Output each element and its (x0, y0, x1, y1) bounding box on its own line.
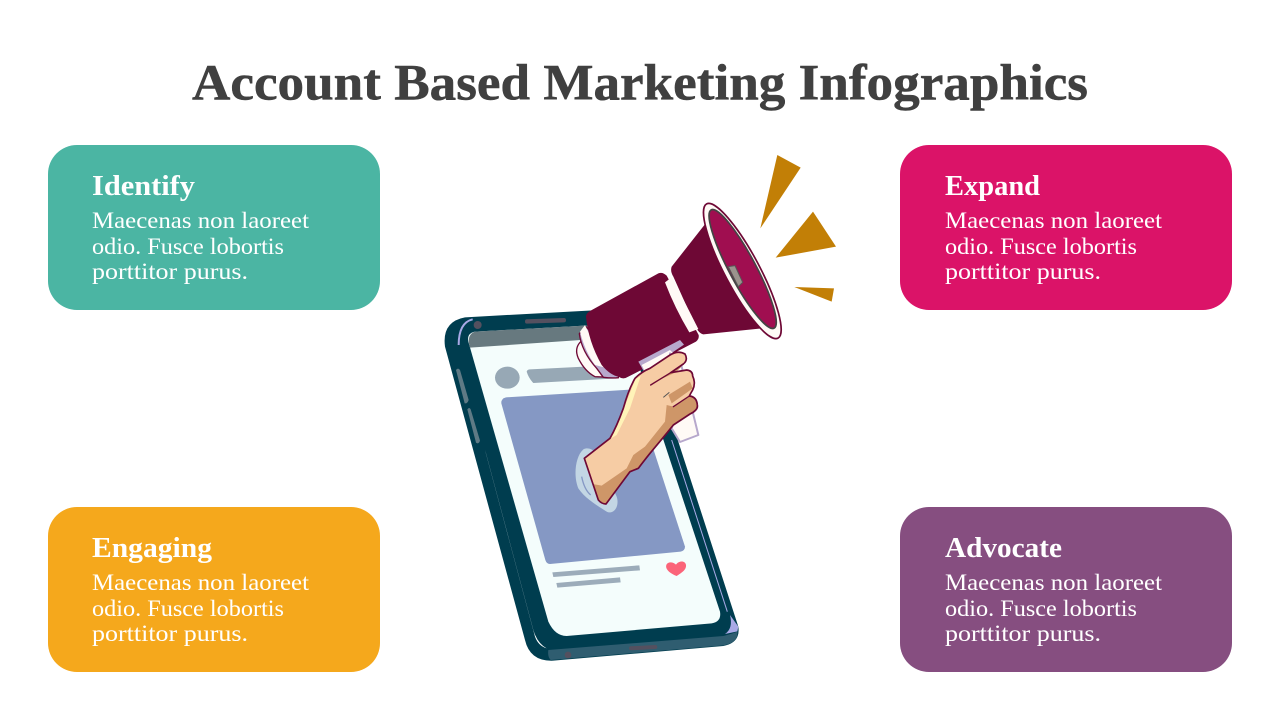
title: Account Based Marketing Infographics (192, 56, 1088, 112)
text block: advocate: Maecenas non laoreet (945, 570, 1163, 595)
heading: advocate: Advocate (945, 532, 1062, 564)
icon: hand holding handle (584, 340, 698, 504)
collar band (665, 277, 698, 332)
text block: identify (92, 208, 310, 284)
text block: expand: porttitor purus. (945, 259, 1101, 284)
text block: engaging (92, 570, 310, 646)
text block: expand (945, 208, 1163, 284)
rim (691, 196, 793, 346)
text block: engaging: odio. Fusce lobortis (92, 596, 284, 621)
heading: identify: Identify (92, 170, 196, 202)
panel: identify (48, 145, 380, 310)
text block: identify: odio. Fusce lobortis (92, 234, 284, 259)
icon: heart (666, 561, 686, 576)
rear cap (577, 327, 620, 378)
text block: advocate (945, 570, 1163, 646)
heading: expand: Expand (945, 170, 1040, 202)
avatar (495, 367, 520, 389)
bell inner (699, 204, 786, 334)
text block: advocate: porttitor purus. (945, 621, 1101, 646)
hand highlight (611, 376, 641, 439)
panel: engaging (48, 507, 380, 672)
panel: expand (900, 145, 1232, 310)
name bar (527, 365, 617, 383)
hand fill (584, 352, 697, 504)
text block: engaging: Maecenas non laoreet (92, 570, 310, 595)
caption lines (552, 565, 640, 588)
icon: megaphone (577, 155, 836, 378)
hand outline (584, 352, 697, 504)
sound burst (760, 155, 836, 302)
text block: engaging: porttitor purus. (92, 621, 248, 646)
handle (638, 340, 698, 442)
hand shadow (593, 396, 697, 504)
panel: advocate (900, 507, 1232, 672)
screen (468, 323, 720, 636)
post image (501, 389, 685, 564)
text block: expand: odio. Fusce lobortis (945, 234, 1137, 259)
text block: advocate: odio. Fusce lobortis (945, 596, 1137, 621)
text block: expand: Maecenas non laoreet (945, 208, 1163, 233)
finger creases (651, 373, 689, 407)
text block: identify: porttitor purus. (92, 259, 248, 284)
heading: engaging: Engaging (92, 532, 212, 564)
bell (671, 223, 768, 334)
icon: smartphone (445, 308, 739, 661)
hole splash (576, 448, 618, 512)
text block: identify: Maecenas non laoreet (92, 208, 310, 233)
camera and speaker (474, 318, 657, 658)
barrel (586, 273, 699, 378)
screen top bar (469, 323, 630, 348)
side buttons (456, 369, 480, 443)
driver (728, 266, 743, 287)
